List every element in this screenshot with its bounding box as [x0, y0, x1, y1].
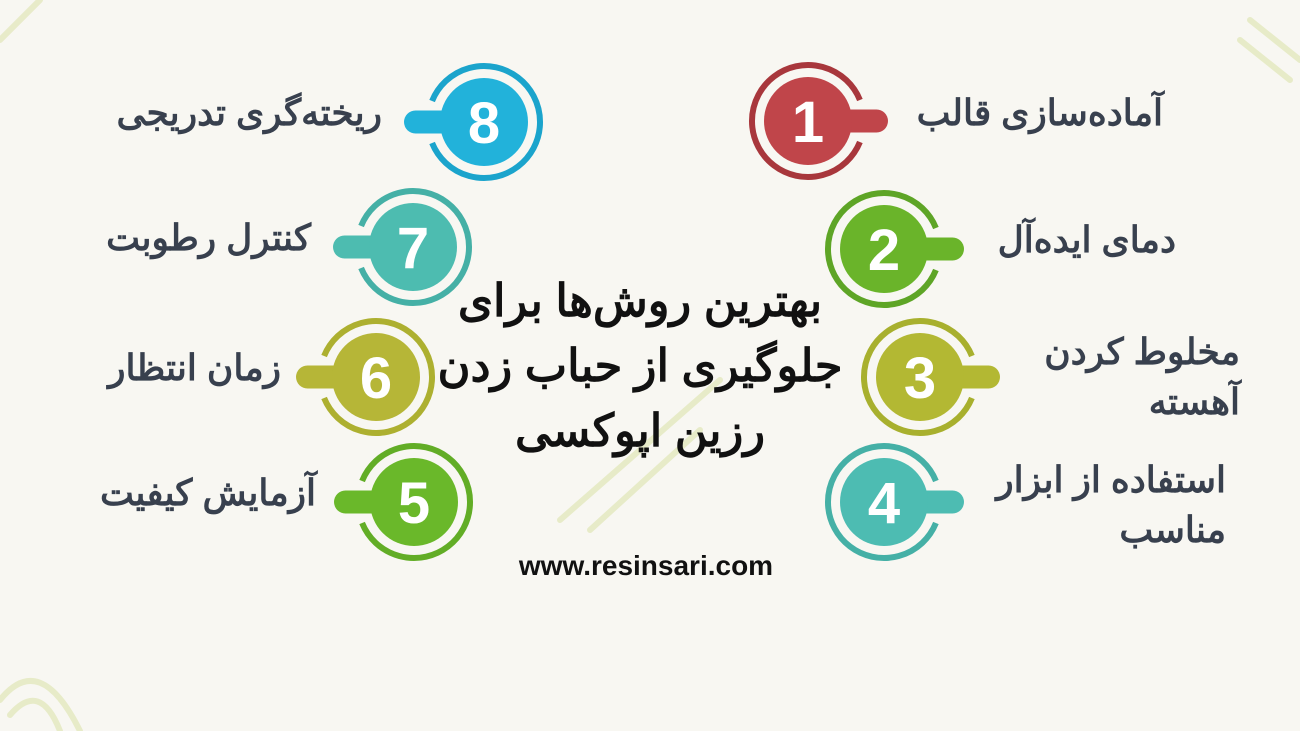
- item 2: [828, 193, 964, 305]
- label 8: ریخته‌گری تدریجی: [116, 91, 382, 135]
- label 6: زمان انتظار: [105, 347, 281, 390]
- item 6: 6: [360, 346, 392, 411]
- item 4: [828, 446, 964, 558]
- label 2: دمای ایده‌آل: [998, 216, 1176, 260]
- label 1: آماده‌سازی قالب: [917, 89, 1165, 135]
- item 8: [404, 66, 540, 178]
- item 7: 7: [397, 216, 429, 281]
- item 5: [334, 446, 470, 558]
- item 1: [752, 65, 888, 177]
- label 7: کنترل رطوبت: [106, 217, 312, 260]
- item 8: 8: [468, 91, 500, 156]
- title: رزین اپوکسی: [515, 405, 765, 458]
- label 3: آهسته: [1149, 378, 1242, 422]
- item 3: 3: [904, 346, 936, 411]
- item 3: [864, 321, 1000, 433]
- label 5: آزمایش کیفیت: [100, 469, 318, 515]
- item 6: [296, 321, 432, 433]
- item 7: [333, 191, 469, 303]
- label 4: استفاده از ابزار: [993, 459, 1226, 502]
- item 4: 4: [868, 471, 900, 536]
- website: www.resinsari.com: [518, 550, 773, 581]
- title: جلوگیری از حباب زدن: [437, 339, 843, 393]
- label 4: مناسب: [1119, 509, 1226, 550]
- item 2: 2: [868, 218, 900, 283]
- label 3: مخلوط کردن: [1044, 331, 1240, 374]
- title: بهترین روش‌ها برای: [458, 275, 822, 328]
- item 1: 1: [792, 90, 824, 155]
- item 5: 5: [398, 471, 430, 536]
